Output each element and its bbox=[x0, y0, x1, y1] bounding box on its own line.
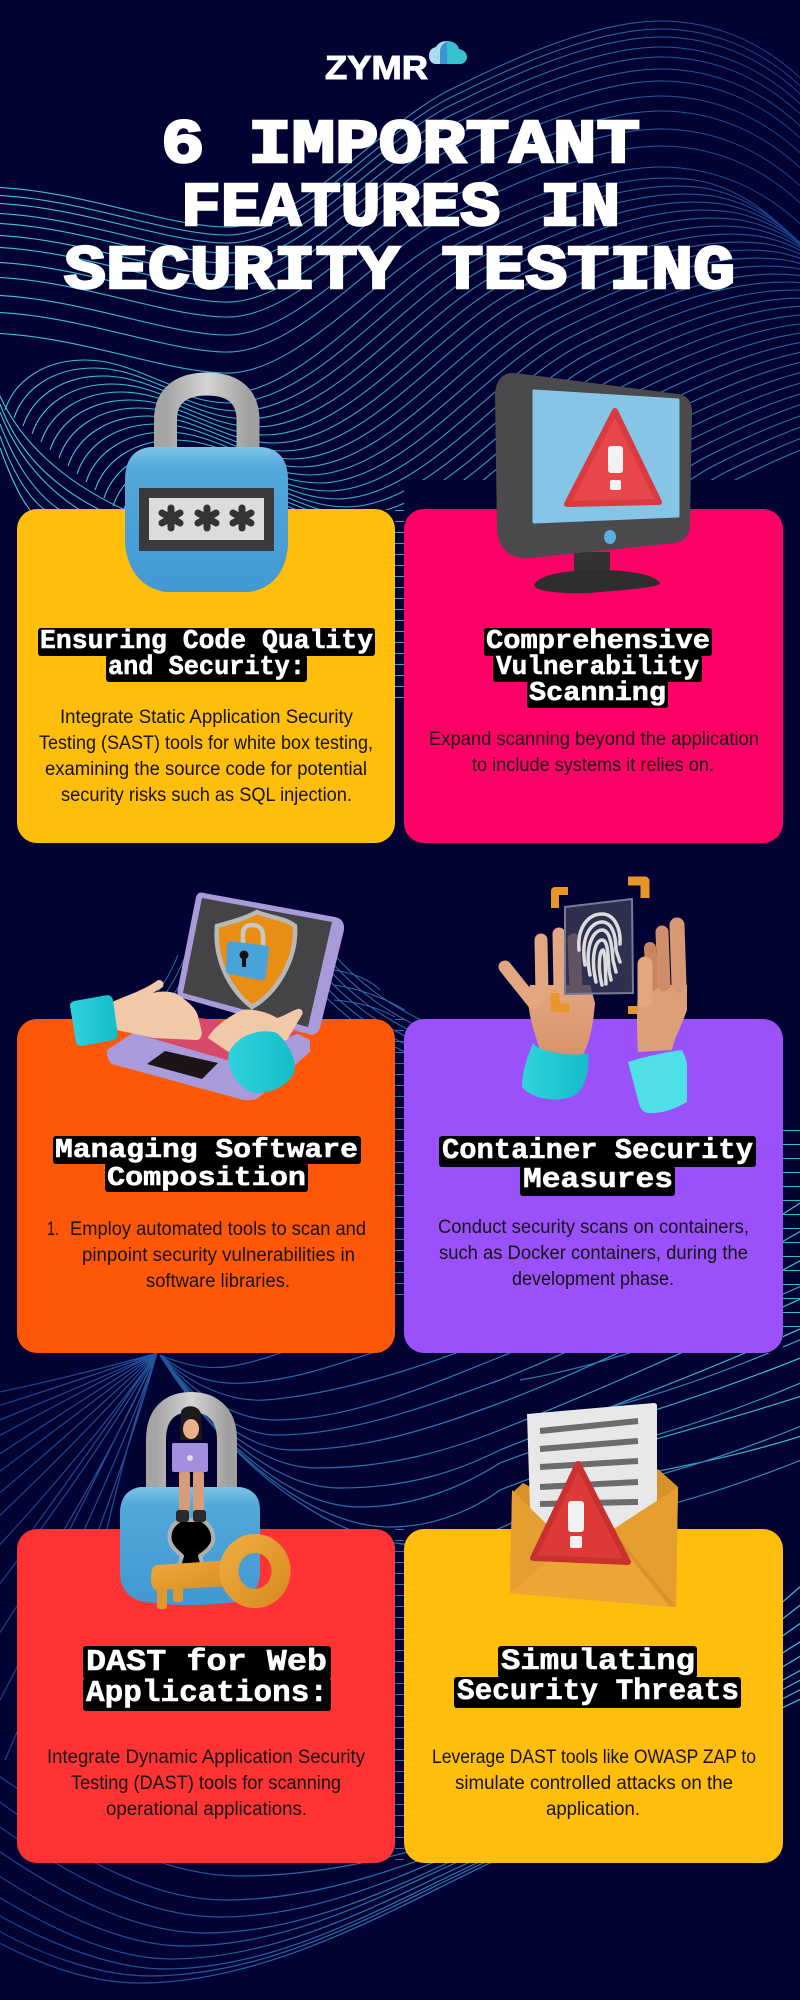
body text: Leverage DAST tools like OWASP ZAP to bbox=[432, 1747, 756, 1768]
icon: laptop with shield and hands bbox=[70, 892, 344, 1100]
body text bbox=[47, 1219, 366, 1292]
body text: operational applications. bbox=[106, 1799, 307, 1820]
body text bbox=[47, 1747, 365, 1820]
icon: hands with fingerprint bbox=[505, 881, 690, 1113]
panel: simulating threats bbox=[404, 1403, 783, 1863]
body text bbox=[432, 1747, 756, 1820]
card background bbox=[404, 509, 783, 843]
heading: Simulating bbox=[501, 1645, 695, 1679]
body text: examining the source code for potential bbox=[45, 759, 367, 780]
body text bbox=[39, 707, 373, 806]
body text: Employ automated tools to scan and bbox=[70, 1219, 366, 1240]
icon: envelope with warning bbox=[510, 1403, 678, 1607]
body text: Expand scanning beyond the application bbox=[429, 729, 759, 750]
heading bbox=[83, 1645, 331, 1711]
panel: DAST bbox=[17, 1402, 395, 1863]
heading bbox=[53, 1136, 361, 1194]
heading: Applications: bbox=[86, 1676, 328, 1711]
icon: cloud bbox=[429, 41, 467, 64]
heading: Container Security bbox=[442, 1134, 753, 1167]
body text: such as Docker containers, during the bbox=[439, 1243, 748, 1264]
body text: pinpoint security vulnerabilities in bbox=[82, 1245, 355, 1266]
card background bbox=[404, 1529, 783, 1863]
body text: Integrate Dynamic Application Security bbox=[47, 1747, 365, 1768]
body text: security risks such as SQL injection. bbox=[61, 785, 352, 806]
heading bbox=[439, 1134, 756, 1196]
panel: container security bbox=[404, 881, 783, 1353]
body text: application. bbox=[546, 1799, 640, 1820]
body text: Testing (DAST) tools for scanning bbox=[71, 1773, 341, 1794]
title: FEATURES IN bbox=[181, 173, 620, 244]
body text: Testing (SAST) tools for white box testing, bbox=[39, 733, 373, 754]
background waves: middle bbox=[148, 950, 425, 1052]
body text: development phase. bbox=[512, 1269, 674, 1290]
panel: vulnerability scanning bbox=[404, 373, 783, 843]
card background bbox=[17, 1529, 395, 1863]
logo bbox=[325, 41, 467, 86]
heading: Measures bbox=[523, 1163, 673, 1196]
heading bbox=[38, 627, 375, 683]
body text bbox=[438, 1217, 749, 1290]
body text bbox=[429, 729, 759, 776]
panel: software composition bbox=[17, 892, 395, 1353]
icon: padlock with password bbox=[125, 384, 288, 592]
heading: Security Threats bbox=[457, 1675, 739, 1709]
heading: and Security: bbox=[108, 653, 305, 683]
panel: code quality bbox=[17, 384, 395, 843]
card background bbox=[17, 509, 395, 843]
icon: padlock with key and person bbox=[120, 1402, 281, 1609]
heading bbox=[484, 627, 712, 709]
heading: Managing Software bbox=[55, 1136, 358, 1166]
heading: Vulnerability bbox=[496, 653, 699, 683]
heading: Scanning bbox=[529, 679, 666, 709]
body text: software libraries. bbox=[146, 1271, 290, 1292]
body text: 1. bbox=[47, 1219, 59, 1240]
title: 6 IMPORTANT bbox=[161, 110, 640, 181]
heading: Ensuring Code Quality bbox=[40, 627, 373, 657]
heading bbox=[454, 1645, 741, 1709]
body text: Integrate Static Application Security bbox=[60, 707, 353, 728]
card background bbox=[17, 1019, 395, 1353]
title: SECURITY TESTING bbox=[64, 236, 735, 307]
title bbox=[64, 110, 735, 307]
card background bbox=[404, 1019, 783, 1353]
background waves: gaps and margins bbox=[400, 510, 792, 1863]
body text: simulate controlled attacks on the bbox=[455, 1773, 733, 1794]
heading: Composition bbox=[107, 1164, 306, 1194]
heading: DAST for Web bbox=[86, 1645, 327, 1680]
body text: to include systems it relies on. bbox=[472, 755, 714, 776]
body text: Conduct security scans on containers, bbox=[438, 1217, 749, 1238]
background waves: bottom bbox=[0, 1190, 800, 1983]
icon: monitor with warning bbox=[495, 373, 692, 593]
logo wordmark: ZYMR bbox=[325, 49, 428, 86]
heading: Comprehensive bbox=[486, 627, 710, 657]
background waves: top bbox=[0, 20, 800, 510]
